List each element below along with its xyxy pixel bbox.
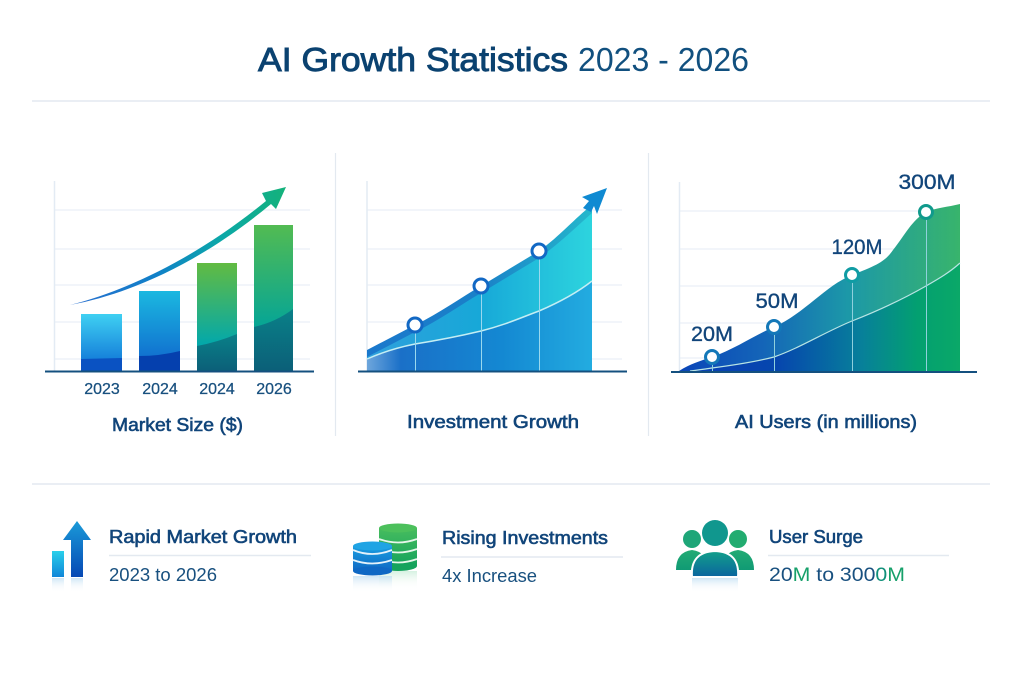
- icon: rising arrow and bar: [52, 521, 91, 592]
- arrow: market growth trend: [70, 187, 286, 305]
- area chart: users: [679, 204, 960, 371]
- stat: rising investments: [353, 524, 623, 592]
- stat: rising investments: Rising Investments: [442, 528, 608, 548]
- arrow: investment trend: [582, 188, 607, 214]
- heading: market size: Market Size ($): [112, 415, 243, 435]
- stat: user surge: User Surge: [769, 527, 863, 547]
- heading: investment growth: Investment Growth: [407, 412, 579, 432]
- stat: rapid market growth: [52, 521, 311, 592]
- value labels: 50M: [756, 290, 798, 313]
- title: AI Growth Statistics: [258, 41, 568, 78]
- stat: user surge: 20M to 300 0M: [769, 565, 905, 586]
- year labels: 2026: [256, 381, 292, 398]
- year labels: 2023: [84, 381, 120, 398]
- heading: AI users: AI Users (in millions): [735, 412, 917, 432]
- icon: users group: [676, 520, 754, 592]
- value labels: 300M: [898, 171, 956, 194]
- year labels: 2024: [199, 381, 235, 398]
- year labels: 2024: [142, 381, 178, 398]
- title: 2023 - 2026: [578, 41, 749, 78]
- value labels: 120M: [832, 236, 882, 259]
- year labels: [84, 381, 292, 398]
- value labels: [691, 171, 956, 346]
- area chart: investment: [367, 205, 592, 371]
- markers: user points: [706, 206, 932, 364]
- stat: rising investments: 4x Increase: [442, 566, 537, 586]
- icon: coin stacks: [353, 524, 417, 592]
- value labels: 20M: [691, 323, 733, 346]
- panel: investment growth: [358, 181, 627, 432]
- stat: user surge: [676, 520, 949, 592]
- panel: AI users: [671, 171, 977, 432]
- stat: rapid market growth: 2023 to 2026: [109, 565, 217, 585]
- bar chart: market size bars: [81, 225, 293, 371]
- panel: market size: [45, 181, 314, 435]
- markers: investment points: [408, 244, 546, 332]
- stat: rapid market growth: Rapid Market Growth: [109, 527, 297, 547]
